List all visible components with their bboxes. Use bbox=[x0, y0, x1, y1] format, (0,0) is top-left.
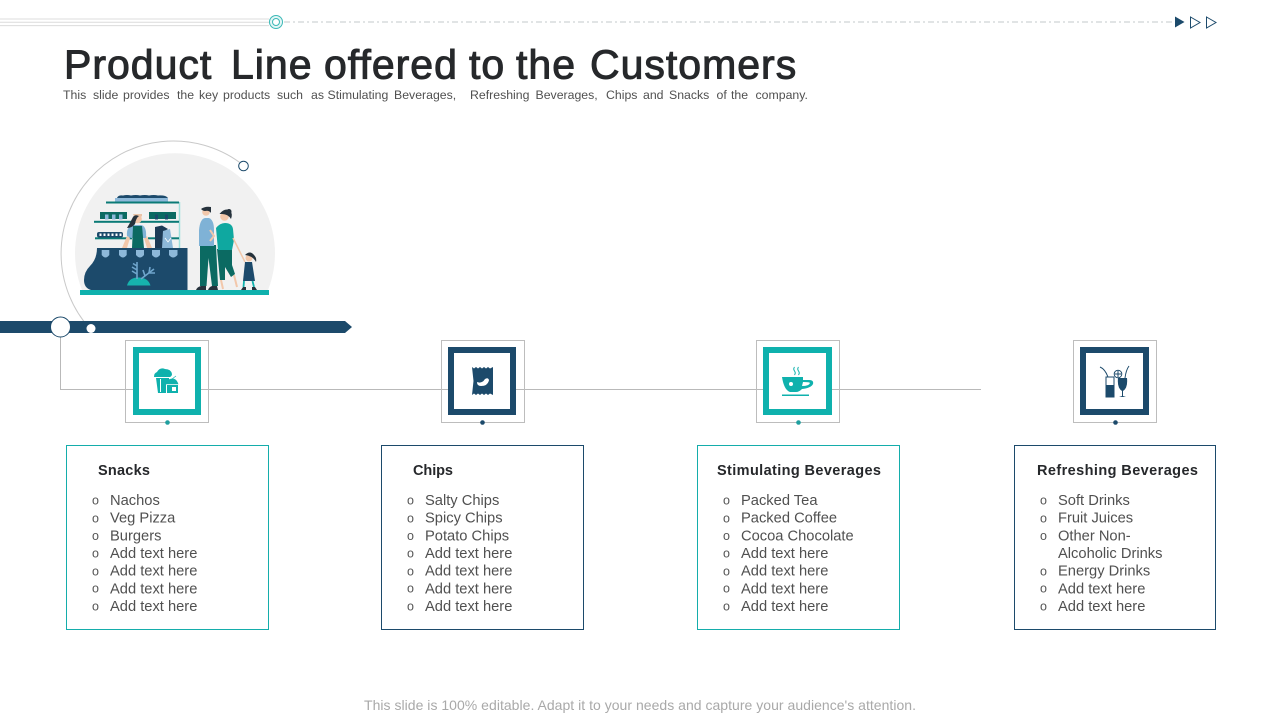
icon: refreshing beverages bbox=[1074, 340, 1156, 425]
subtitle: the bbox=[177, 88, 194, 102]
subtitle: slide bbox=[93, 88, 118, 102]
list: snacks: Add text here bbox=[110, 546, 197, 562]
list: refreshing beverages: Soft Drinks bbox=[1058, 493, 1130, 509]
list: chips: o bbox=[407, 564, 414, 578]
orbit end marker bbox=[239, 161, 248, 171]
subtitle: of bbox=[716, 88, 727, 102]
heading: chips: Chips bbox=[413, 463, 453, 479]
list: stimulating beverages: Add text here bbox=[741, 546, 828, 562]
woman bbox=[216, 209, 245, 289]
title: Product bbox=[64, 42, 212, 88]
list: refreshing beverages bbox=[1040, 493, 1162, 615]
subtitle: This bbox=[63, 88, 86, 102]
background circle bbox=[75, 153, 275, 290]
list: refreshing beverages: Fruit Juices bbox=[1058, 511, 1133, 527]
list: stimulating beverages: o bbox=[723, 512, 730, 526]
list: chips: Add text here bbox=[425, 599, 512, 615]
list: stimulating beverages: Cocoa Chocolate bbox=[741, 528, 854, 544]
list: snacks: Add text here bbox=[110, 564, 197, 580]
list: stimulating beverages: Add text here bbox=[741, 564, 828, 580]
list: chips: o bbox=[407, 600, 414, 614]
icon: snacks bbox=[126, 340, 208, 425]
shelves bbox=[94, 195, 180, 248]
subtitle: Stimulating bbox=[328, 88, 388, 102]
list: stimulating beverages: o bbox=[723, 564, 730, 578]
subtitle: Beverages, bbox=[536, 88, 598, 102]
list: refreshing beverages: Add text here bbox=[1058, 581, 1145, 597]
list: stimulating beverages: Add text here bbox=[741, 599, 828, 615]
list: stimulating beverages: o bbox=[723, 546, 730, 560]
subtitle: products bbox=[223, 88, 270, 102]
panel: stimulating beverages bbox=[698, 446, 900, 630]
heading: snacks: Snacks bbox=[98, 463, 150, 479]
subtitle: Chips bbox=[606, 88, 637, 102]
list: stimulating beverages: Packed Tea bbox=[741, 493, 818, 509]
list: snacks: o bbox=[92, 512, 99, 526]
footer note: This slide is 100% editable. Adapt it to your needs and capture your audience's attention. bbox=[364, 697, 916, 713]
icon: chips bbox=[442, 340, 524, 425]
subtitle: provides bbox=[123, 88, 169, 102]
list: refreshing beverages: Alcoholic Drinks bbox=[1058, 546, 1162, 562]
subtitle: Snacks bbox=[669, 88, 709, 102]
list: chips bbox=[407, 493, 512, 615]
title: offered bbox=[324, 42, 458, 88]
illustration: shop with family bbox=[61, 141, 275, 329]
list: refreshing beverages: o bbox=[1040, 494, 1047, 508]
top decorative timeline bbox=[0, 16, 1216, 28]
ground bbox=[80, 290, 269, 295]
shopkeeper bbox=[122, 214, 152, 248]
list: chips: Potato Chips bbox=[425, 528, 509, 544]
list: chips: Add text here bbox=[425, 546, 512, 562]
list: snacks bbox=[92, 493, 197, 615]
icon: stimulating beverages bbox=[756, 340, 840, 425]
list: refreshing beverages: o bbox=[1040, 600, 1047, 614]
list: chips: o bbox=[407, 546, 414, 560]
list: snacks: o bbox=[92, 582, 99, 596]
list: chips: o bbox=[407, 582, 414, 596]
list: refreshing beverages: o bbox=[1040, 582, 1047, 596]
list: stimulating beverages: o bbox=[723, 600, 730, 614]
list: chips: o bbox=[407, 512, 414, 526]
list: snacks: o bbox=[92, 529, 99, 543]
subtitle: company. bbox=[756, 88, 808, 102]
list: snacks: Burgers bbox=[110, 528, 161, 544]
list: snacks: o bbox=[92, 494, 99, 508]
panel: refreshing beverages bbox=[1014, 446, 1216, 630]
list: snacks: o bbox=[92, 546, 99, 560]
list: stimulating beverages bbox=[723, 493, 854, 615]
shopping bags bbox=[155, 226, 173, 248]
list: stimulating beverages: Packed Coffee bbox=[741, 511, 837, 527]
subtitle: key bbox=[199, 88, 219, 102]
list: chips: Spicy Chips bbox=[425, 511, 503, 527]
list: chips: Add text here bbox=[425, 581, 512, 597]
list: stimulating beverages: o bbox=[723, 529, 730, 543]
counter bbox=[84, 248, 188, 290]
list: chips: Salty Chips bbox=[425, 493, 499, 509]
subtitle: and bbox=[643, 88, 664, 102]
list: snacks: o bbox=[92, 564, 99, 578]
navy ribbon arrow bbox=[0, 317, 352, 337]
list: refreshing beverages: Add text here bbox=[1058, 599, 1145, 615]
list: chips: o bbox=[407, 529, 414, 543]
list: snacks: o bbox=[92, 600, 99, 614]
list: stimulating beverages: o bbox=[723, 582, 730, 596]
list: snacks: Veg Pizza bbox=[110, 511, 176, 527]
list: chips: o bbox=[407, 494, 414, 508]
heading: refreshing beverages: Refreshing Beverages bbox=[1037, 463, 1198, 479]
list: chips: Add text here bbox=[425, 564, 512, 580]
list: refreshing beverages: o bbox=[1040, 512, 1047, 526]
list: refreshing beverages: Energy Drinks bbox=[1058, 564, 1150, 580]
panel: snacks bbox=[66, 446, 268, 630]
man bbox=[196, 207, 218, 290]
title: Line bbox=[231, 42, 313, 88]
heading: stimulating beverages: Stimulating Beverages bbox=[717, 463, 881, 479]
orbit arc bbox=[61, 141, 240, 329]
list: refreshing beverages: o bbox=[1040, 529, 1047, 543]
list: stimulating beverages: Add text here bbox=[741, 581, 828, 597]
subtitle: as bbox=[311, 88, 324, 102]
child bbox=[241, 252, 257, 290]
list: snacks: Nachos bbox=[110, 493, 160, 509]
list: stimulating beverages: o bbox=[723, 494, 730, 508]
title: to bbox=[469, 42, 505, 88]
subtitle: such bbox=[277, 88, 303, 102]
subtitle: Beverages, bbox=[394, 88, 456, 102]
list: refreshing beverages: Other Non- bbox=[1058, 528, 1131, 544]
title: the bbox=[516, 42, 576, 88]
connector line bbox=[60, 336, 981, 390]
subtitle: the bbox=[731, 88, 748, 102]
list: snacks: Add text here bbox=[110, 581, 197, 597]
list: snacks: Add text here bbox=[110, 599, 197, 615]
list: refreshing beverages: o bbox=[1040, 564, 1047, 578]
subtitle: Refreshing bbox=[470, 88, 530, 102]
panel: chips bbox=[382, 446, 584, 630]
title: Customers bbox=[590, 42, 797, 88]
